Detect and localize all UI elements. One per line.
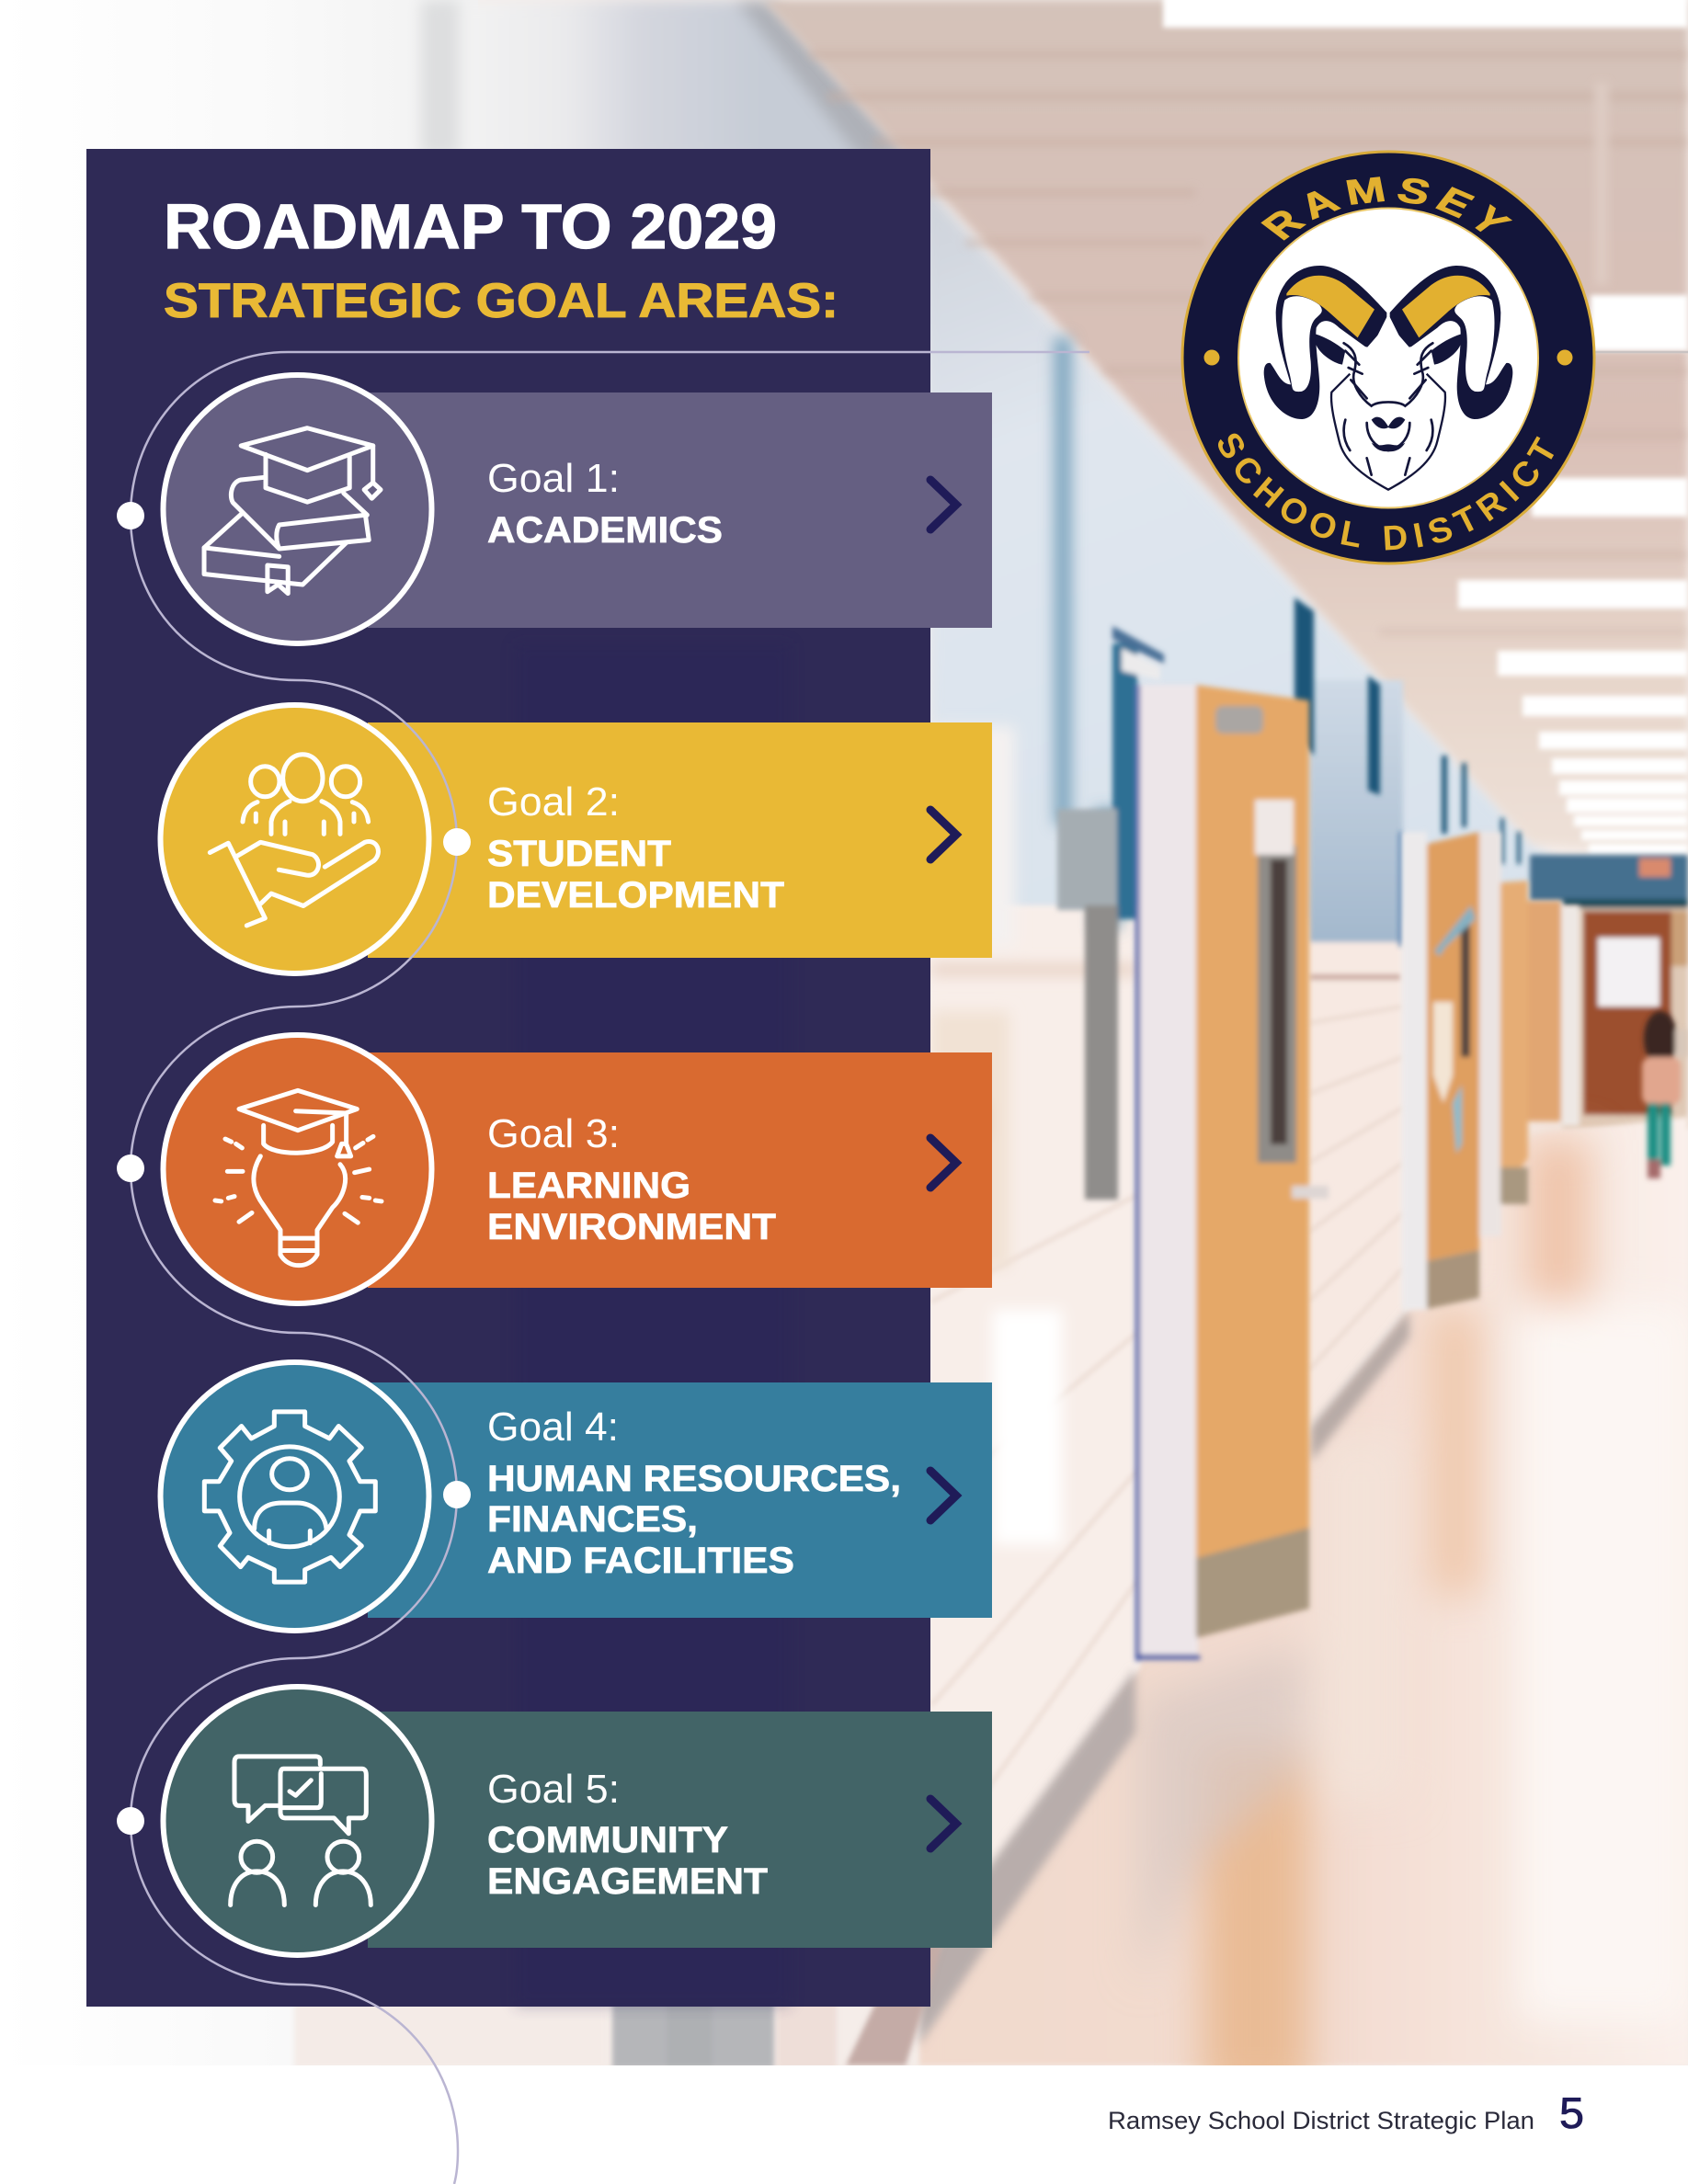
text: goal 1: Goal 1: [487,456,620,501]
ceiling [763,0,1688,855]
circle: goal 5 with conversation icon [164,1687,432,1955]
bar: goal 1 [368,392,992,628]
logo text top: RAMSEY [1260,176,1512,241]
text: goal 5: ENGAGEMENT [487,1861,768,1902]
text: goal 5 [487,1767,768,1902]
title: Roadmap to 2029: ROADMAP TO 2029 [164,191,777,262]
wall brick lines [931,1007,1403,1867]
subtitle: Strategic goal areas: STRATEGIC GOAL AREAS: [164,274,838,328]
icon: ram head [1264,266,1512,490]
text: goal 2: STUDENT [487,834,671,874]
blue door frame and pipe box [1057,597,1521,1200]
upper wall [421,0,1563,919]
text: goal 3: Goal 3: [487,1111,620,1156]
icon: hand holding people [210,755,378,926]
footer white band [0,2065,1688,2184]
text: goal 4 [487,1405,901,1581]
text: goal 1 [487,456,723,551]
left pale wall [0,0,421,2065]
background photo: school hallway [291,0,1688,2065]
text: goal 4: FINANCES, [487,1499,698,1540]
first classroom door [1135,685,1329,1661]
panel: navy roadmap panel [86,149,930,2007]
circle: goal 3 with lightbulb icon [164,1035,432,1303]
footer text: Ramsey School District Strategic Plan [1108,2107,1534,2134]
text: goal 3 [487,1111,776,1247]
icon: two people talking [231,1757,371,1905]
ceiling stripes [809,51,1688,634]
text: goal 4: HUMAN RESOURCES, [487,1459,901,1499]
page number: 5 [1559,2088,1584,2137]
text: goal 4: Goal 4: [487,1405,619,1450]
arrows: chevrons [930,480,956,1848]
lower white brick wall [1011,678,1405,1677]
text: goal 2 [487,779,784,916]
icon: graduation cap on lightbulb [215,1090,382,1266]
text: goal 2: Goal 2: [487,779,620,825]
text: goal 4: AND FACILITIES [487,1541,794,1581]
ceiling lights [1163,0,1688,855]
icon: gear with person [204,1412,375,1582]
text: goal 2: DEVELOPMENT [487,875,784,916]
bar: goal 4 [368,1382,992,1618]
bottom strip gray reflection [294,1948,940,2065]
far end wall, door and exit [1530,855,1688,1129]
circle: goal 4 with gear icon [160,1362,428,1631]
logo: Ramsey School District badge [1180,151,1596,564]
icon: graduation cap on books [204,428,381,594]
baseboards [919,1310,1409,2045]
circle: goal 1 with books icon [164,375,432,643]
floor [919,1117,1688,2065]
timeline curve [131,352,1688,2184]
timeline dots [117,502,471,1835]
logo text bottom: SCHOOL DISTRICT [1218,434,1554,550]
text: goal 1: ACADEMICS [487,510,723,551]
bar: goal 2 [368,722,992,958]
girl walking [1642,1011,1688,1178]
circle: goal 2 with hand and people icon [160,705,428,973]
blurred near-wall details [931,337,1138,1544]
ram face [1331,314,1445,490]
bar: goal 3 [368,1052,992,1288]
bar: goal 5 [368,1712,992,1948]
text: goal 3: LEARNING [487,1166,690,1206]
second and third classroom doors [1402,832,1580,1310]
text: goal 5: Goal 5: [487,1767,620,1812]
text: goal 5: COMMUNITY [487,1820,728,1860]
text: goal 3: ENVIRONMENT [487,1207,776,1247]
